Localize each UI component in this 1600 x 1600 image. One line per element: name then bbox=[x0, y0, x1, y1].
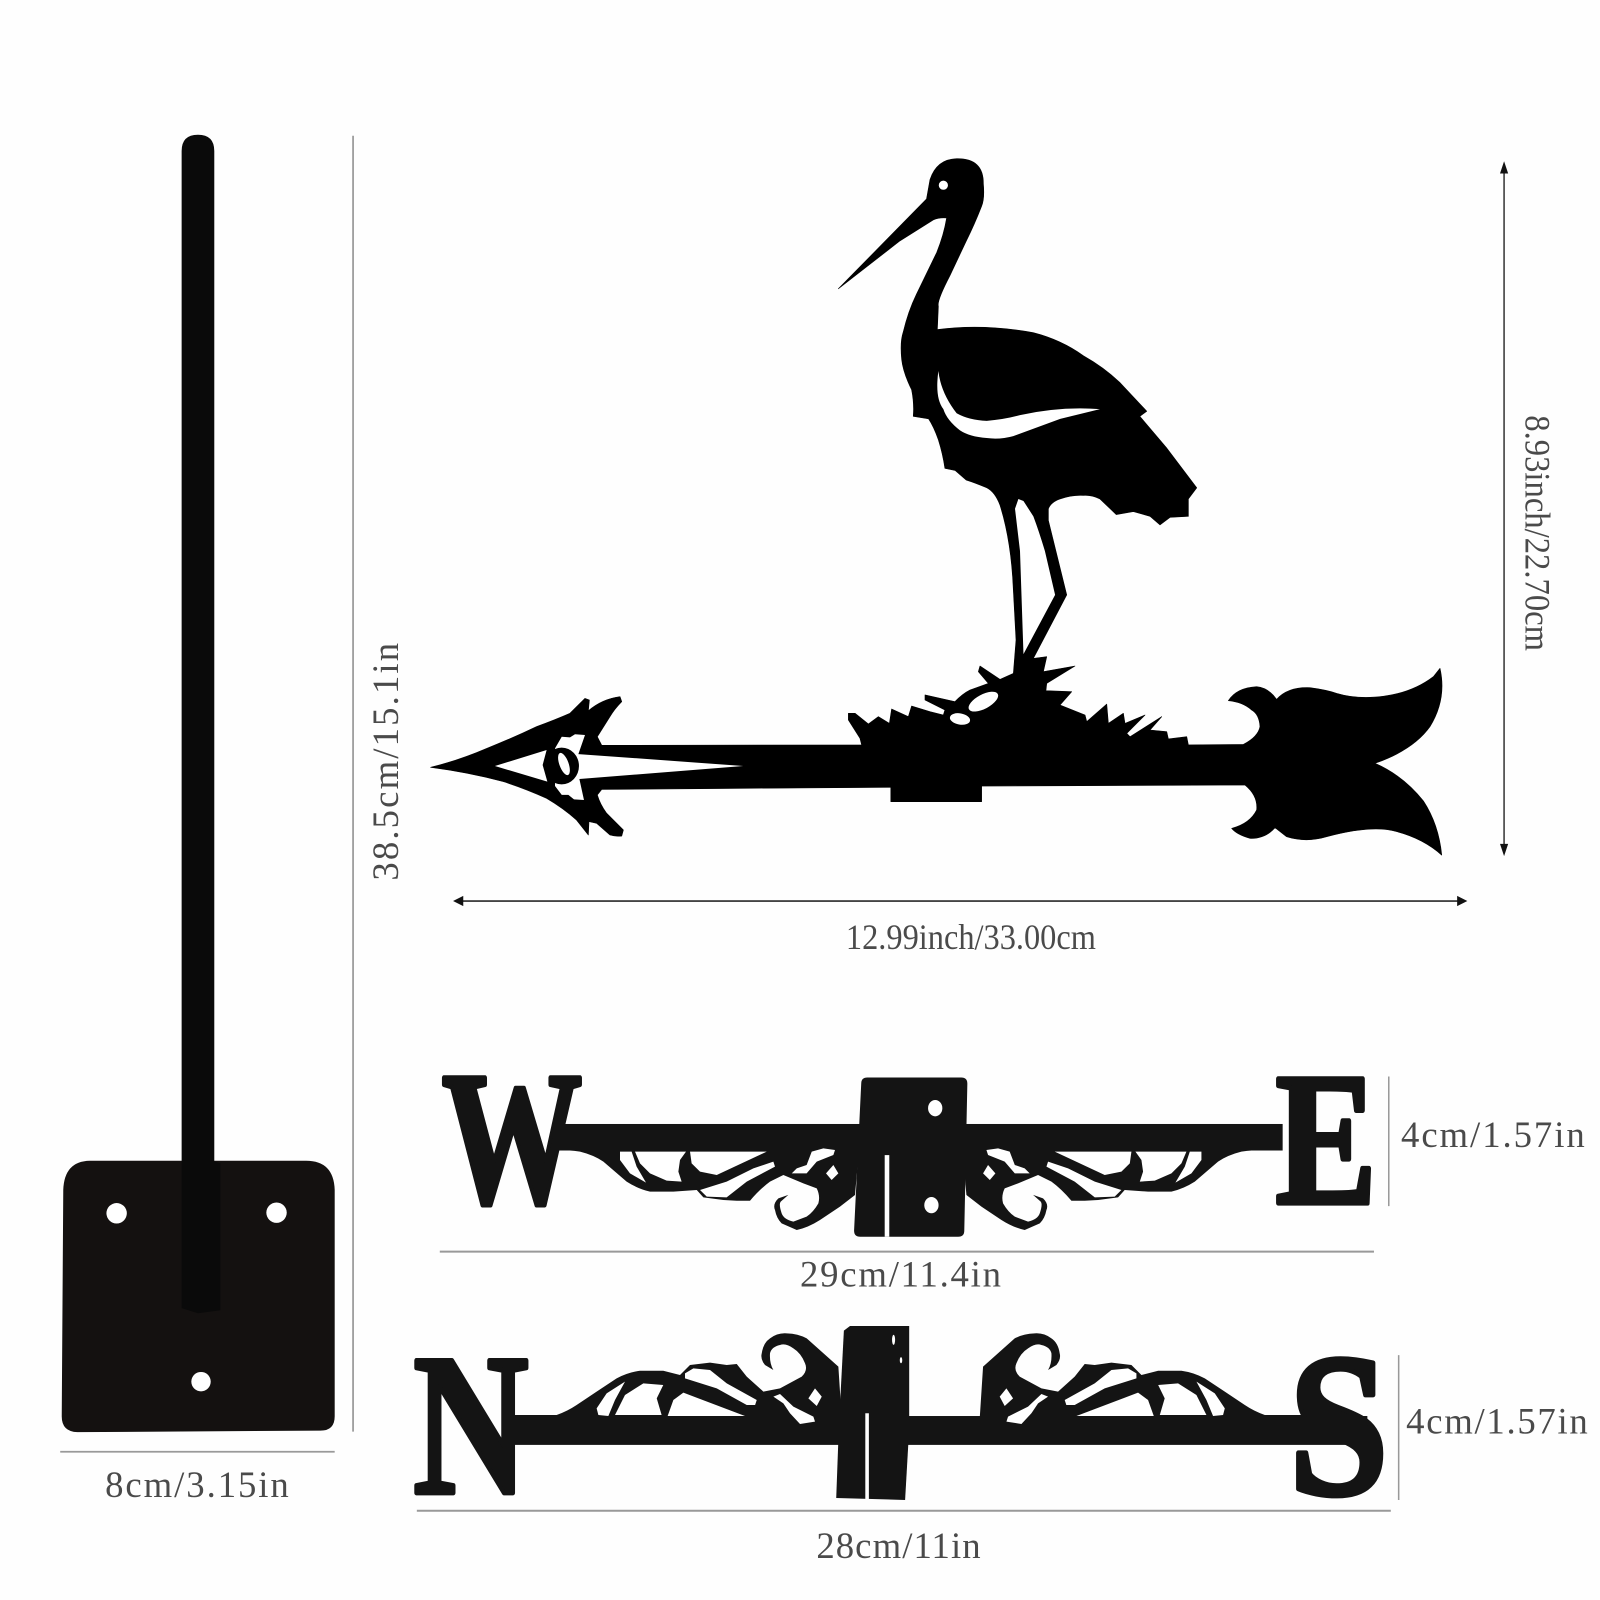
W-E direction bar bbox=[442, 1034, 1377, 1245]
right ornament bbox=[962, 1148, 1266, 1230]
stork eye bbox=[939, 181, 948, 190]
plate width dimension: 8cm/3.15in bbox=[105, 1464, 289, 1505]
left ornament cutouts bbox=[597, 1368, 822, 1424]
letter W: W bbox=[442, 1034, 582, 1244]
pole height dimension: 38.5cm/15.1in bbox=[365, 643, 406, 881]
height dimension arrow bbox=[1500, 161, 1508, 856]
bar bbox=[556, 1124, 1283, 1151]
wing swoosh bbox=[937, 371, 1100, 439]
plate holes bbox=[106, 1202, 287, 1391]
center plate bbox=[836, 1326, 909, 1500]
height dimension label: 8.93inch/22.70cm bbox=[1518, 415, 1558, 651]
letter N: N bbox=[413, 1314, 529, 1537]
base plate bbox=[62, 1161, 335, 1432]
W-E width dimension: 29cm/11.4in bbox=[800, 1254, 1001, 1295]
width dimension label: 12.99inch/33.00cm bbox=[846, 917, 1096, 957]
width dimension arrow bbox=[453, 896, 1467, 906]
right ornament bbox=[980, 1333, 1306, 1420]
left ornament bbox=[555, 1148, 859, 1230]
nest holes bbox=[949, 688, 1001, 726]
N-S direction bar bbox=[413, 1312, 1389, 1538]
letter E: E bbox=[1276, 1035, 1377, 1245]
right ornament cutouts bbox=[1000, 1368, 1225, 1424]
bar bbox=[510, 1416, 1367, 1445]
pole bbox=[182, 135, 220, 1313]
letter S: S bbox=[1289, 1312, 1389, 1538]
plate slit bbox=[865, 1335, 902, 1500]
N-S width dimension: 28cm/11in bbox=[816, 1525, 981, 1566]
N-S height dimension: 4cm/1.57in bbox=[1406, 1401, 1588, 1442]
left ornament bbox=[515, 1333, 842, 1420]
W-E height dimension: 4cm/1.57in bbox=[1401, 1114, 1585, 1155]
gap between legs bbox=[1015, 499, 1055, 654]
arrow head cutouts bbox=[495, 734, 743, 800]
plate slit and holes bbox=[885, 1100, 942, 1237]
stork on arrow silhouette bbox=[431, 159, 1442, 855]
center plate bbox=[854, 1078, 967, 1237]
mounting pole with base plate bbox=[62, 135, 335, 1432]
